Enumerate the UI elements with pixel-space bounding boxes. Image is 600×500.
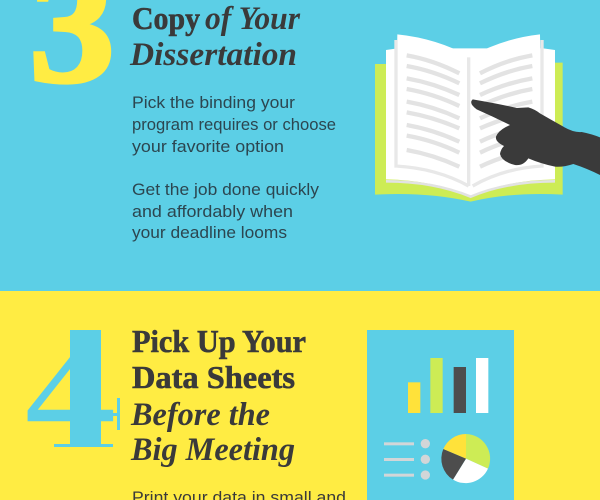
text lines, left page bbox=[407, 55, 459, 167]
panel: step 4 background bbox=[0, 291, 600, 500]
text block: binding advice bbox=[132, 94, 336, 156]
bar chart bbox=[408, 358, 488, 413]
heading: step 4: Big Meeting bbox=[130, 432, 295, 468]
heading: step 4: Data Sheets bbox=[132, 359, 295, 395]
heading: step 3: Copy bbox=[132, 0, 200, 36]
sheet bbox=[367, 330, 514, 500]
front pages bbox=[395, 34, 542, 187]
number 4 foot serif bbox=[54, 444, 113, 447]
book cover bbox=[375, 63, 563, 202]
panel: step 3 background bbox=[0, 0, 600, 291]
heading: step 4: Pick Up Your bbox=[132, 323, 306, 359]
legend bbox=[384, 439, 430, 480]
text block: deadline advice: your deadline looms bbox=[132, 224, 287, 242]
text block: binding advice: your favorite option bbox=[132, 138, 284, 156]
back pages bbox=[386, 48, 555, 197]
pointing hand bbox=[471, 99, 600, 175]
heading: step 3: Dissertation bbox=[129, 37, 297, 73]
text block: deadline advice: Get the job done quickly bbox=[132, 181, 320, 199]
number 4: 4 bbox=[24, 298, 116, 481]
pie chart bbox=[441, 434, 490, 483]
panel: data sheet illustration bbox=[367, 330, 514, 500]
text block: binding advice: program requires or choose bbox=[132, 116, 336, 134]
number 4 crossbar end bbox=[100, 413, 120, 416]
text lines, right page bbox=[480, 55, 532, 167]
heading: step 3 bbox=[129, 0, 301, 73]
page edge shadow bbox=[386, 181, 555, 197]
icon: open book with pointing hand bbox=[375, 34, 600, 202]
text block: deadline advice: and affordably when bbox=[132, 203, 293, 221]
heading: step 4: Before the bbox=[130, 397, 270, 433]
heading: step 4 bbox=[130, 323, 306, 468]
number 4 stem bbox=[70, 330, 101, 445]
text block: binding advice: Pick the binding your bbox=[132, 94, 296, 112]
page gutter bbox=[396, 40, 542, 186]
heading: step 3: of Your bbox=[205, 1, 301, 37]
text block: deadline advice bbox=[132, 181, 320, 242]
